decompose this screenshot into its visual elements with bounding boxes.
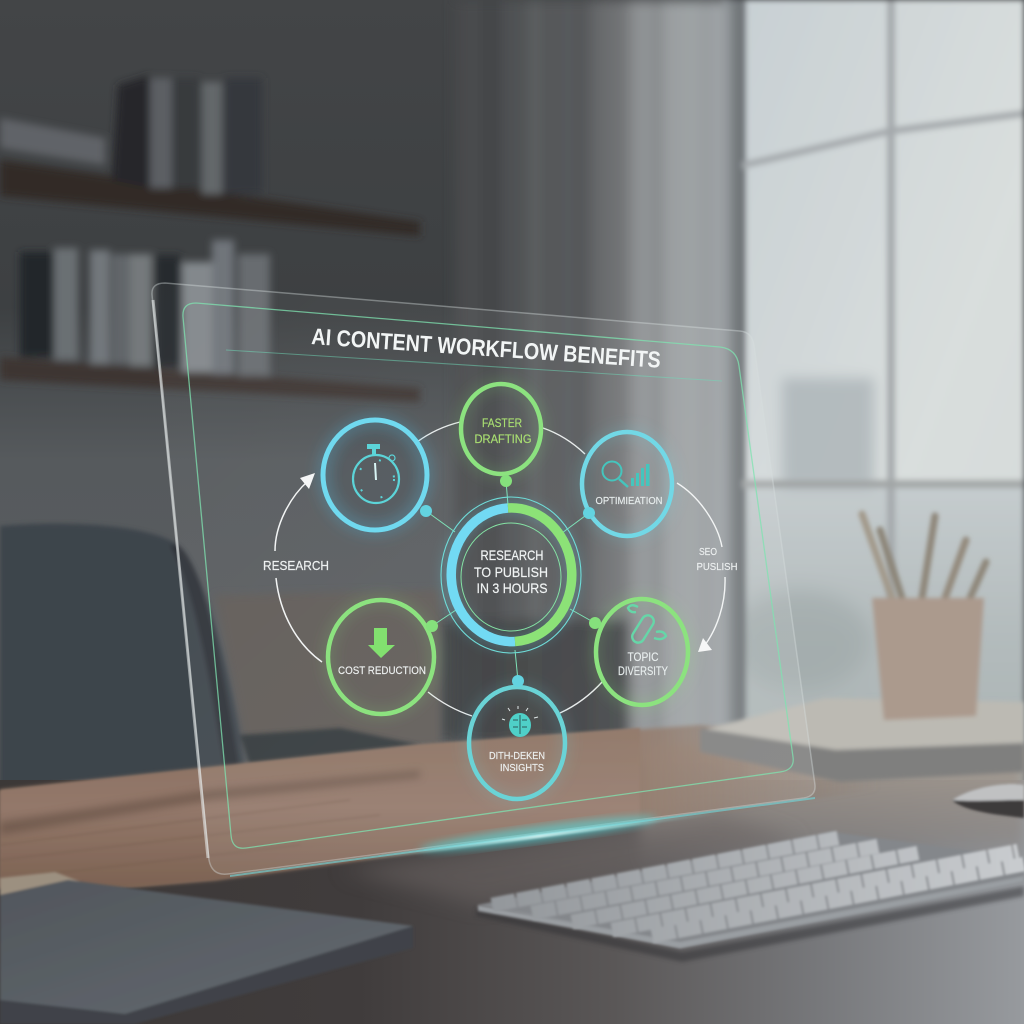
node: faster drafting: [461, 384, 541, 487]
window: [722, 0, 1024, 790]
arrow: seo publish cycle: [677, 483, 725, 652]
office chair: [0, 524, 420, 790]
node: cost reduction: [328, 600, 438, 714]
bookshelves: [0, 75, 420, 402]
stacked book on desk: [700, 698, 1024, 782]
node: topic diversity: [589, 599, 688, 705]
base glow line: [230, 797, 815, 877]
hub text: IN 3 HOURS: [476, 580, 548, 596]
node: insights: DITH-DEKEN: [489, 750, 545, 762]
foreground desk surface: [0, 780, 1024, 1024]
laptop: [0, 872, 413, 1024]
back cabinet: [215, 590, 440, 745]
arrow: research cycle: [275, 473, 322, 662]
keyboard: [476, 832, 1024, 962]
node: topic diversity: DIVERSITY: [618, 664, 668, 678]
icon: brain and bulb: [502, 706, 538, 737]
node: faster drafting: DRAFTING: [474, 432, 532, 446]
hub text: RESEARCH: [480, 547, 544, 563]
node: insights: INSIGHTS: [500, 762, 544, 774]
icon: stopwatch: [353, 444, 399, 503]
hub text: TO PUBLISH: [474, 564, 548, 580]
hub text: [474, 547, 548, 596]
spokes: [426, 481, 595, 681]
inner frame: [183, 303, 793, 848]
node: topic diversity: TOPIC: [628, 650, 659, 664]
node: optimization: [582, 432, 672, 536]
title: AI CONTENT WORKFLOW BENEFITS: [311, 323, 662, 373]
label: seo publish: SEO: [699, 546, 717, 558]
node: cost reduction: COST REDUCTION: [338, 665, 426, 677]
icon: down arrow: [368, 628, 395, 658]
node: faster drafting: FASTER: [482, 416, 522, 430]
node: stopwatch: [323, 420, 432, 530]
label: research: RESEARCH: [263, 558, 329, 573]
panel: glass display: [152, 283, 815, 874]
curtains: [440, 0, 730, 760]
icon: magnifier and bars: [602, 462, 650, 487]
connector arcs: [417, 422, 603, 716]
computer mouse: [952, 784, 1024, 818]
pencil cup: [862, 514, 986, 720]
icon: chain link: [628, 605, 666, 645]
node: optimization: OPTIMIEATION: [596, 495, 662, 507]
node: insights: [469, 675, 565, 799]
central hub: [441, 497, 581, 653]
label: seo publish: PUSLISH: [696, 561, 738, 573]
desk wood surface: [0, 725, 880, 888]
label: seo publish: [696, 546, 738, 573]
title divider: [226, 350, 722, 381]
